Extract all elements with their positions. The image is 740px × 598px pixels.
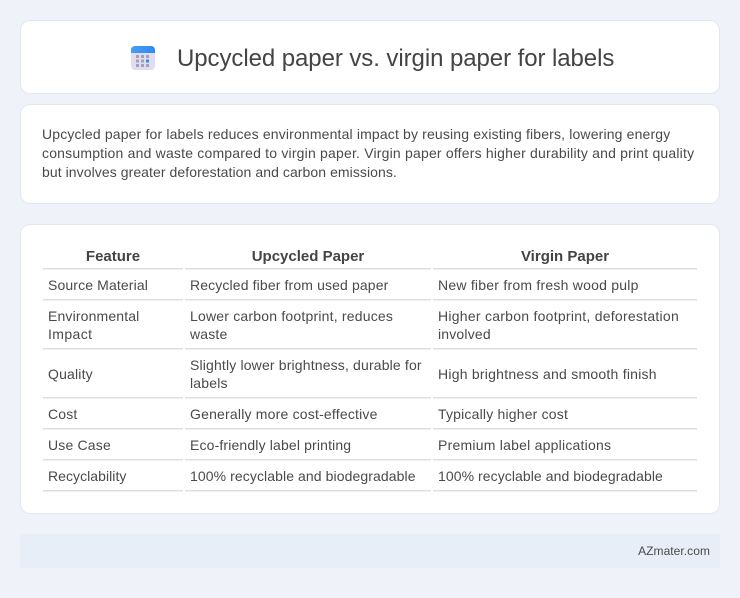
row: quality: Quality	[48, 366, 93, 382]
row: use case: Eco-friendly label printing	[190, 437, 351, 453]
footer credit: AZmater.com	[638, 544, 710, 558]
row: cost	[48, 406, 568, 422]
panel: comparison table	[20, 224, 720, 514]
row: source material: New fiber from fresh wood pulp	[438, 277, 639, 293]
summary text: consumption and waste compared to virgin paper. Virgin paper offers higher durability and print quality	[42, 145, 694, 161]
row: source material	[48, 277, 639, 293]
row: quality: Slightly lower brightness, durable for	[190, 357, 422, 373]
header panel	[20, 20, 720, 94]
row: recyclability: 100% recyclable and biodegradable	[438, 468, 663, 484]
row: recyclability: 100% recyclable and biodegradable	[190, 468, 416, 484]
table header: Upcycled Paper	[252, 248, 364, 265]
row: environmental impact: Lower carbon footprint, reduces	[190, 308, 393, 324]
row: quality: labels	[190, 375, 228, 391]
table header: Virgin Paper	[521, 248, 609, 265]
table header: Feature	[86, 248, 140, 265]
row: use case	[48, 437, 611, 453]
row: environmental impact: Higher carbon footprint, deforestation	[438, 308, 679, 324]
summary text	[42, 126, 694, 180]
row: environmental impact	[48, 308, 679, 342]
table header	[86, 248, 609, 265]
row: use case: Premium label applications	[438, 437, 611, 453]
row: environmental impact: waste	[190, 326, 227, 342]
row: recyclability	[48, 468, 663, 484]
row: cost: Typically higher cost	[438, 406, 568, 422]
footer bar	[20, 534, 720, 568]
row: use case: Use Case	[48, 437, 111, 453]
row: recyclability: Recyclability	[48, 468, 126, 484]
icon: calendar	[131, 46, 155, 70]
summary text: Upcycled paper for labels reduces environmental impact by reusing existing fibers, lowering energy	[42, 126, 670, 142]
panel: summary	[20, 104, 720, 204]
row: source material: Source Material	[48, 277, 148, 293]
title: Upcycled paper vs. virgin paper for labels	[177, 45, 614, 72]
row: quality: High brightness and smooth finish	[438, 366, 657, 382]
row: source material: Recycled fiber from used paper	[190, 277, 388, 293]
row: cost: Cost	[48, 406, 78, 422]
row: environmental impact: Impact	[48, 326, 92, 342]
row: cost: Generally more cost-effective	[190, 406, 378, 422]
summary text: but involves greater deforestation and carbon emissions.	[42, 164, 397, 180]
row: environmental impact: Environmental	[48, 308, 139, 324]
row: environmental impact: involved	[438, 326, 491, 342]
row: quality	[48, 357, 657, 391]
